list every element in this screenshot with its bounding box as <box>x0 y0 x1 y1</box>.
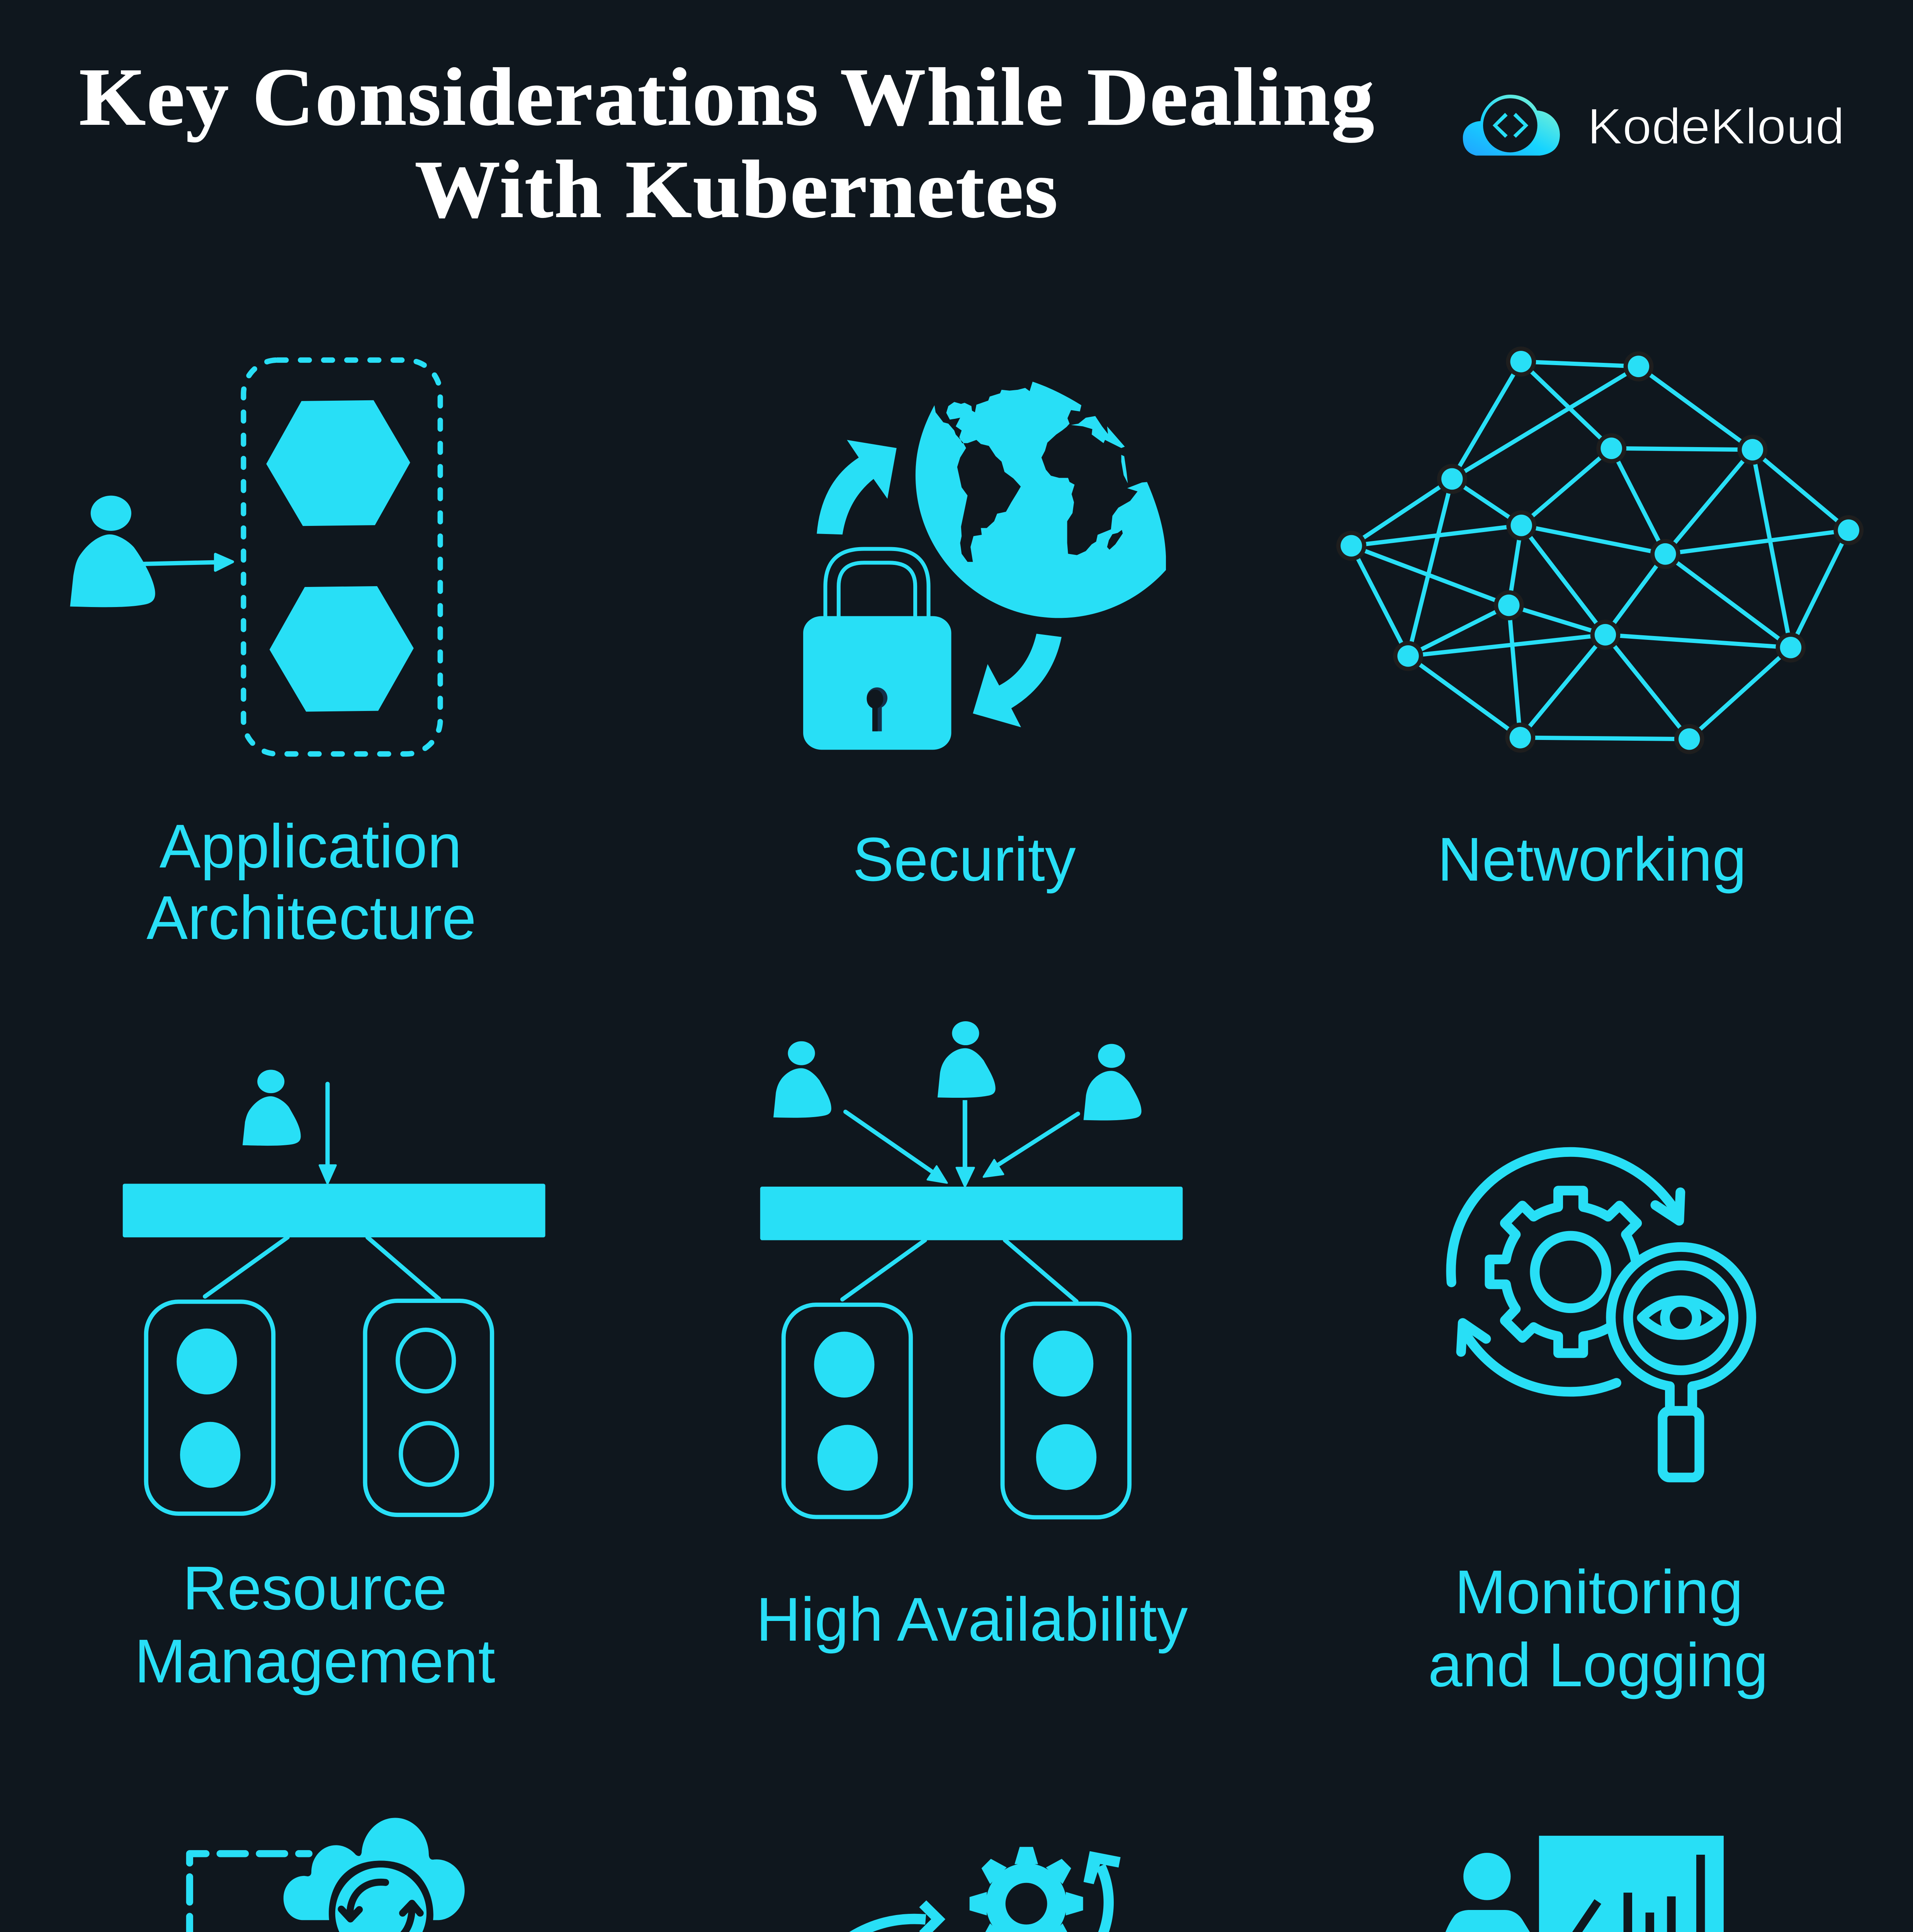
icon: three gears and arrows <box>818 1847 1121 1932</box>
icon: load balancer with one active node <box>123 1070 545 1515</box>
panel: networking <box>1336 347 1864 894</box>
panel: team training <box>1403 1836 1791 1932</box>
title: Key Considerations While Dealing <box>79 51 1375 143</box>
icon: globe, lock and arrows <box>803 373 1172 750</box>
label: Monitoring <box>1454 1557 1743 1626</box>
KodeKloud logo <box>1463 95 1845 156</box>
icon: logo cloud <box>1463 95 1560 156</box>
panel: backup and disaster recovery <box>59 1818 564 1932</box>
panel: resource management <box>123 1070 545 1696</box>
icon: servers on fire with cloud backup <box>146 1818 465 1932</box>
icon: presenter and audience <box>1425 1836 1749 1932</box>
panel: application architecture <box>70 360 476 952</box>
label: Architecture <box>146 883 476 952</box>
title <box>79 51 1375 235</box>
icon: users, load balancer and two active nodes <box>760 1021 1183 1517</box>
icon: user to pods <box>70 360 440 754</box>
label: Networking <box>1437 825 1747 894</box>
label: Management <box>134 1626 495 1696</box>
label: Application <box>160 811 462 881</box>
label: Security <box>853 825 1076 894</box>
panel: high availability <box>756 1021 1188 1654</box>
panel: monitoring and logging <box>1428 1152 1768 1699</box>
title: With Kubernetes <box>415 144 1059 235</box>
icon: gear with magnifying glass and eye <box>1451 1152 1751 1478</box>
icon: network mesh <box>1336 347 1864 754</box>
panel: security <box>803 373 1172 894</box>
label: Resource <box>183 1553 447 1622</box>
panel: automation <box>812 1847 1125 1932</box>
label: and Logging <box>1428 1630 1768 1699</box>
label: High Availability <box>756 1585 1188 1654</box>
logo wordmark: KodeKloud <box>1587 98 1845 155</box>
